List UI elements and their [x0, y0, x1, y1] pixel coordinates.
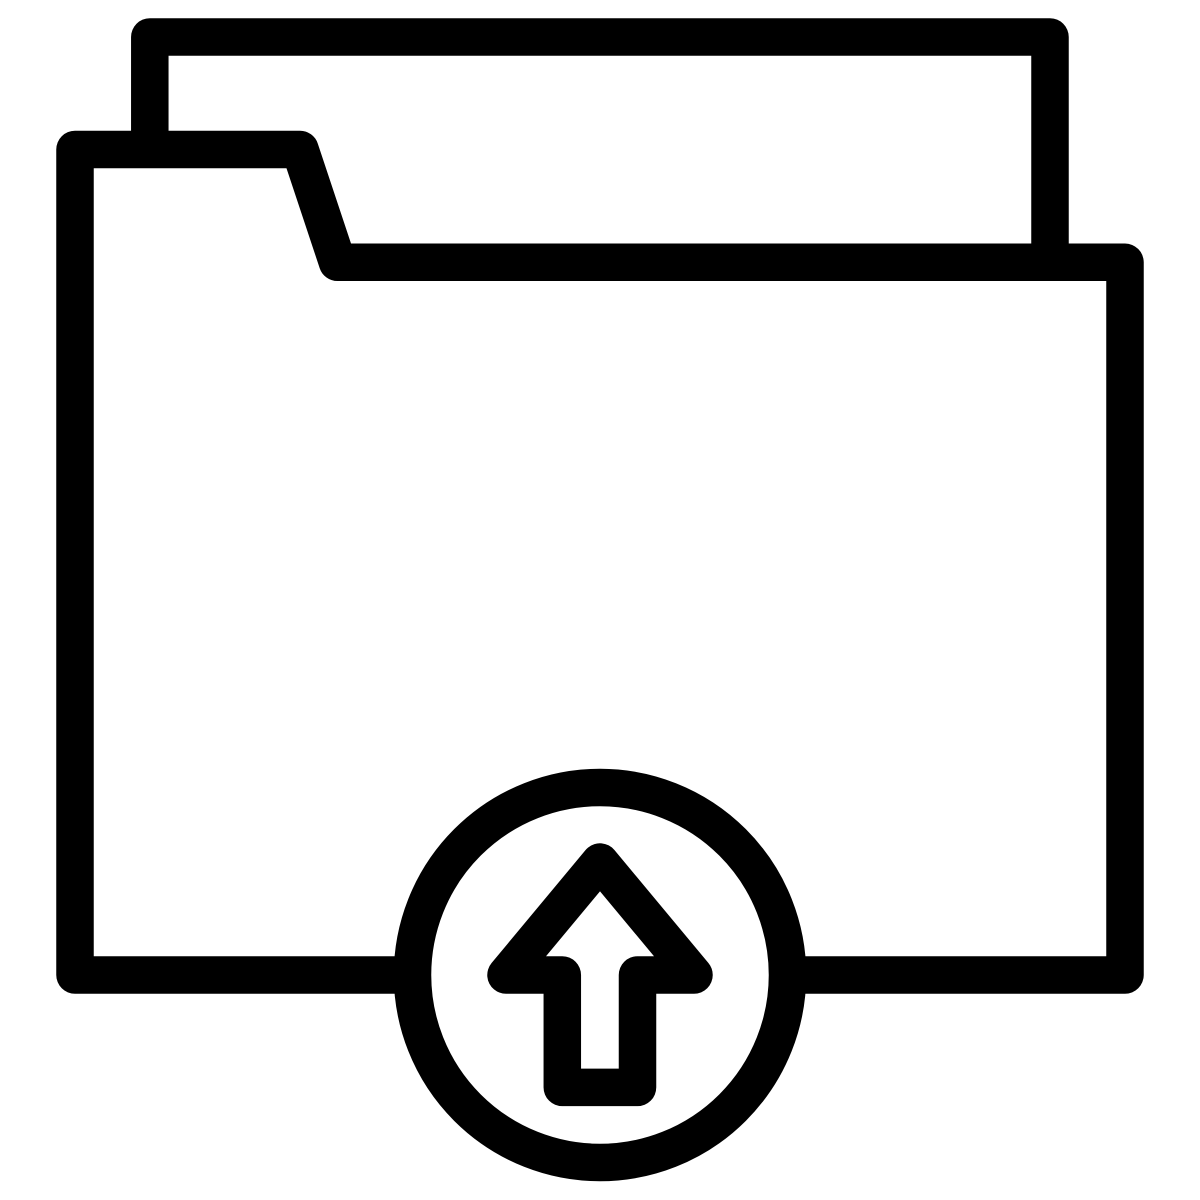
icon: upload arrow — [506, 862, 694, 1087]
icon: folder body — [75, 150, 1125, 975]
icon: upload circle — [412, 788, 788, 1162]
icon: back sheet of paper — [150, 37, 1050, 262]
